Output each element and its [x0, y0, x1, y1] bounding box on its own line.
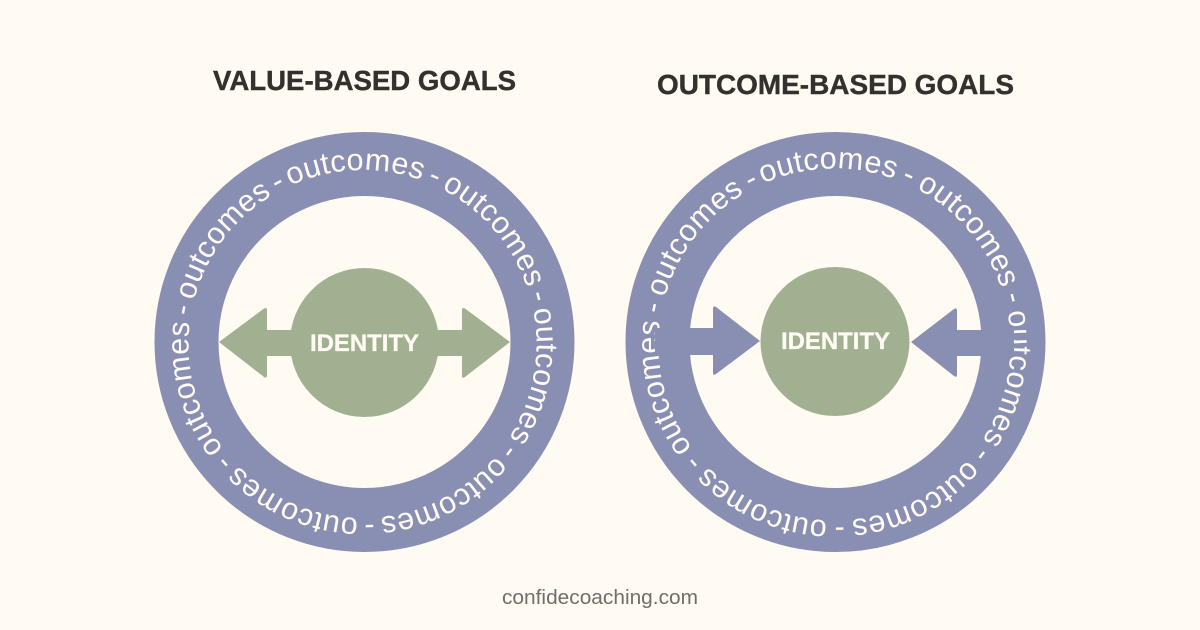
label: identity: IDENTITY [781, 328, 890, 355]
circle: identity [760, 267, 910, 416]
heading: value-based goals: VALUE-BASED GOALS [213, 65, 516, 96]
ring: outcomes: outcomes - outcomes - outcomes - outcomes - outcomes - outcomes - outcomes - [172, 154, 556, 534]
arrow: double arrow outward from identity [219, 308, 510, 378]
footer: website: confidecoaching.com [502, 587, 698, 609]
circle: identity [290, 268, 439, 417]
diagram: value-based goals [154, 132, 574, 552]
heading: outcome-based goals: OUTCOME-BASED GOALS [657, 69, 1014, 100]
ring: outcomes: outcomes - outcomes - outcomes - outcomes - outcomes - outcomes - outcomes - [642, 152, 1030, 536]
label: identity: IDENTITY [310, 330, 419, 357]
diagram: outcome-based goals [626, 132, 1046, 552]
arrow: right arrow pointing inward [911, 308, 1014, 377]
arrow: left arrow pointing inward [655, 306, 760, 375]
